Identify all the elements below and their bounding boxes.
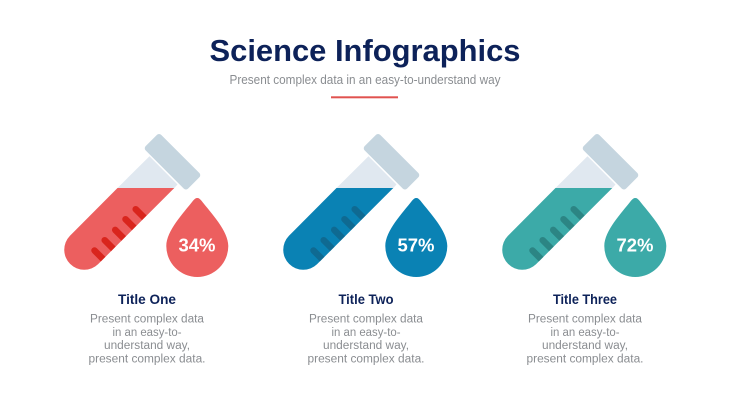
heading: title three: Title Three <box>553 291 617 307</box>
text block: title one: in an easy-to- <box>112 327 182 339</box>
icon: teal drop with 72%: 72% <box>616 236 654 256</box>
text block: title one <box>88 314 206 366</box>
panel: title two <box>283 133 447 366</box>
accent rule <box>331 96 398 98</box>
text block: title two: present complex data. <box>308 354 424 366</box>
icon: blue drop with 57% <box>385 198 447 277</box>
icon: red test tube <box>64 133 201 270</box>
icon: teal test tube <box>502 133 639 270</box>
text block: title two <box>308 314 424 366</box>
text block: title two: in an easy-to- <box>332 327 401 339</box>
icon: blue drop with 57%: 57% <box>398 236 434 256</box>
text block: title one: understand way, <box>104 340 190 352</box>
icon: red drop with 34%: 34% <box>178 236 216 256</box>
text block: title two: Present complex data <box>309 314 424 326</box>
subtitle: Present complex data in an easy-to-understand way <box>230 73 501 87</box>
icon: teal drop with 72% <box>604 198 666 277</box>
text block: title three: in an easy-to- <box>550 327 620 339</box>
text block: title three: Present complex data <box>528 314 643 326</box>
icon: blue test tube <box>283 133 420 270</box>
icon: red drop with 34% <box>166 198 228 277</box>
heading: title one: Title One <box>118 291 176 307</box>
panel: title one <box>64 133 228 366</box>
title: Science Infographics <box>210 33 520 68</box>
text block: title three: understand way, <box>542 340 628 352</box>
heading: title two: Title Two <box>338 291 394 307</box>
text block: title one: Present complex data <box>90 314 205 326</box>
text block: title two: understand way, <box>323 340 409 352</box>
text block: title three: present complex data. <box>526 354 644 366</box>
text block: title three <box>526 314 644 366</box>
text block: title one: present complex data. <box>88 354 206 366</box>
panel: title three <box>502 133 666 366</box>
